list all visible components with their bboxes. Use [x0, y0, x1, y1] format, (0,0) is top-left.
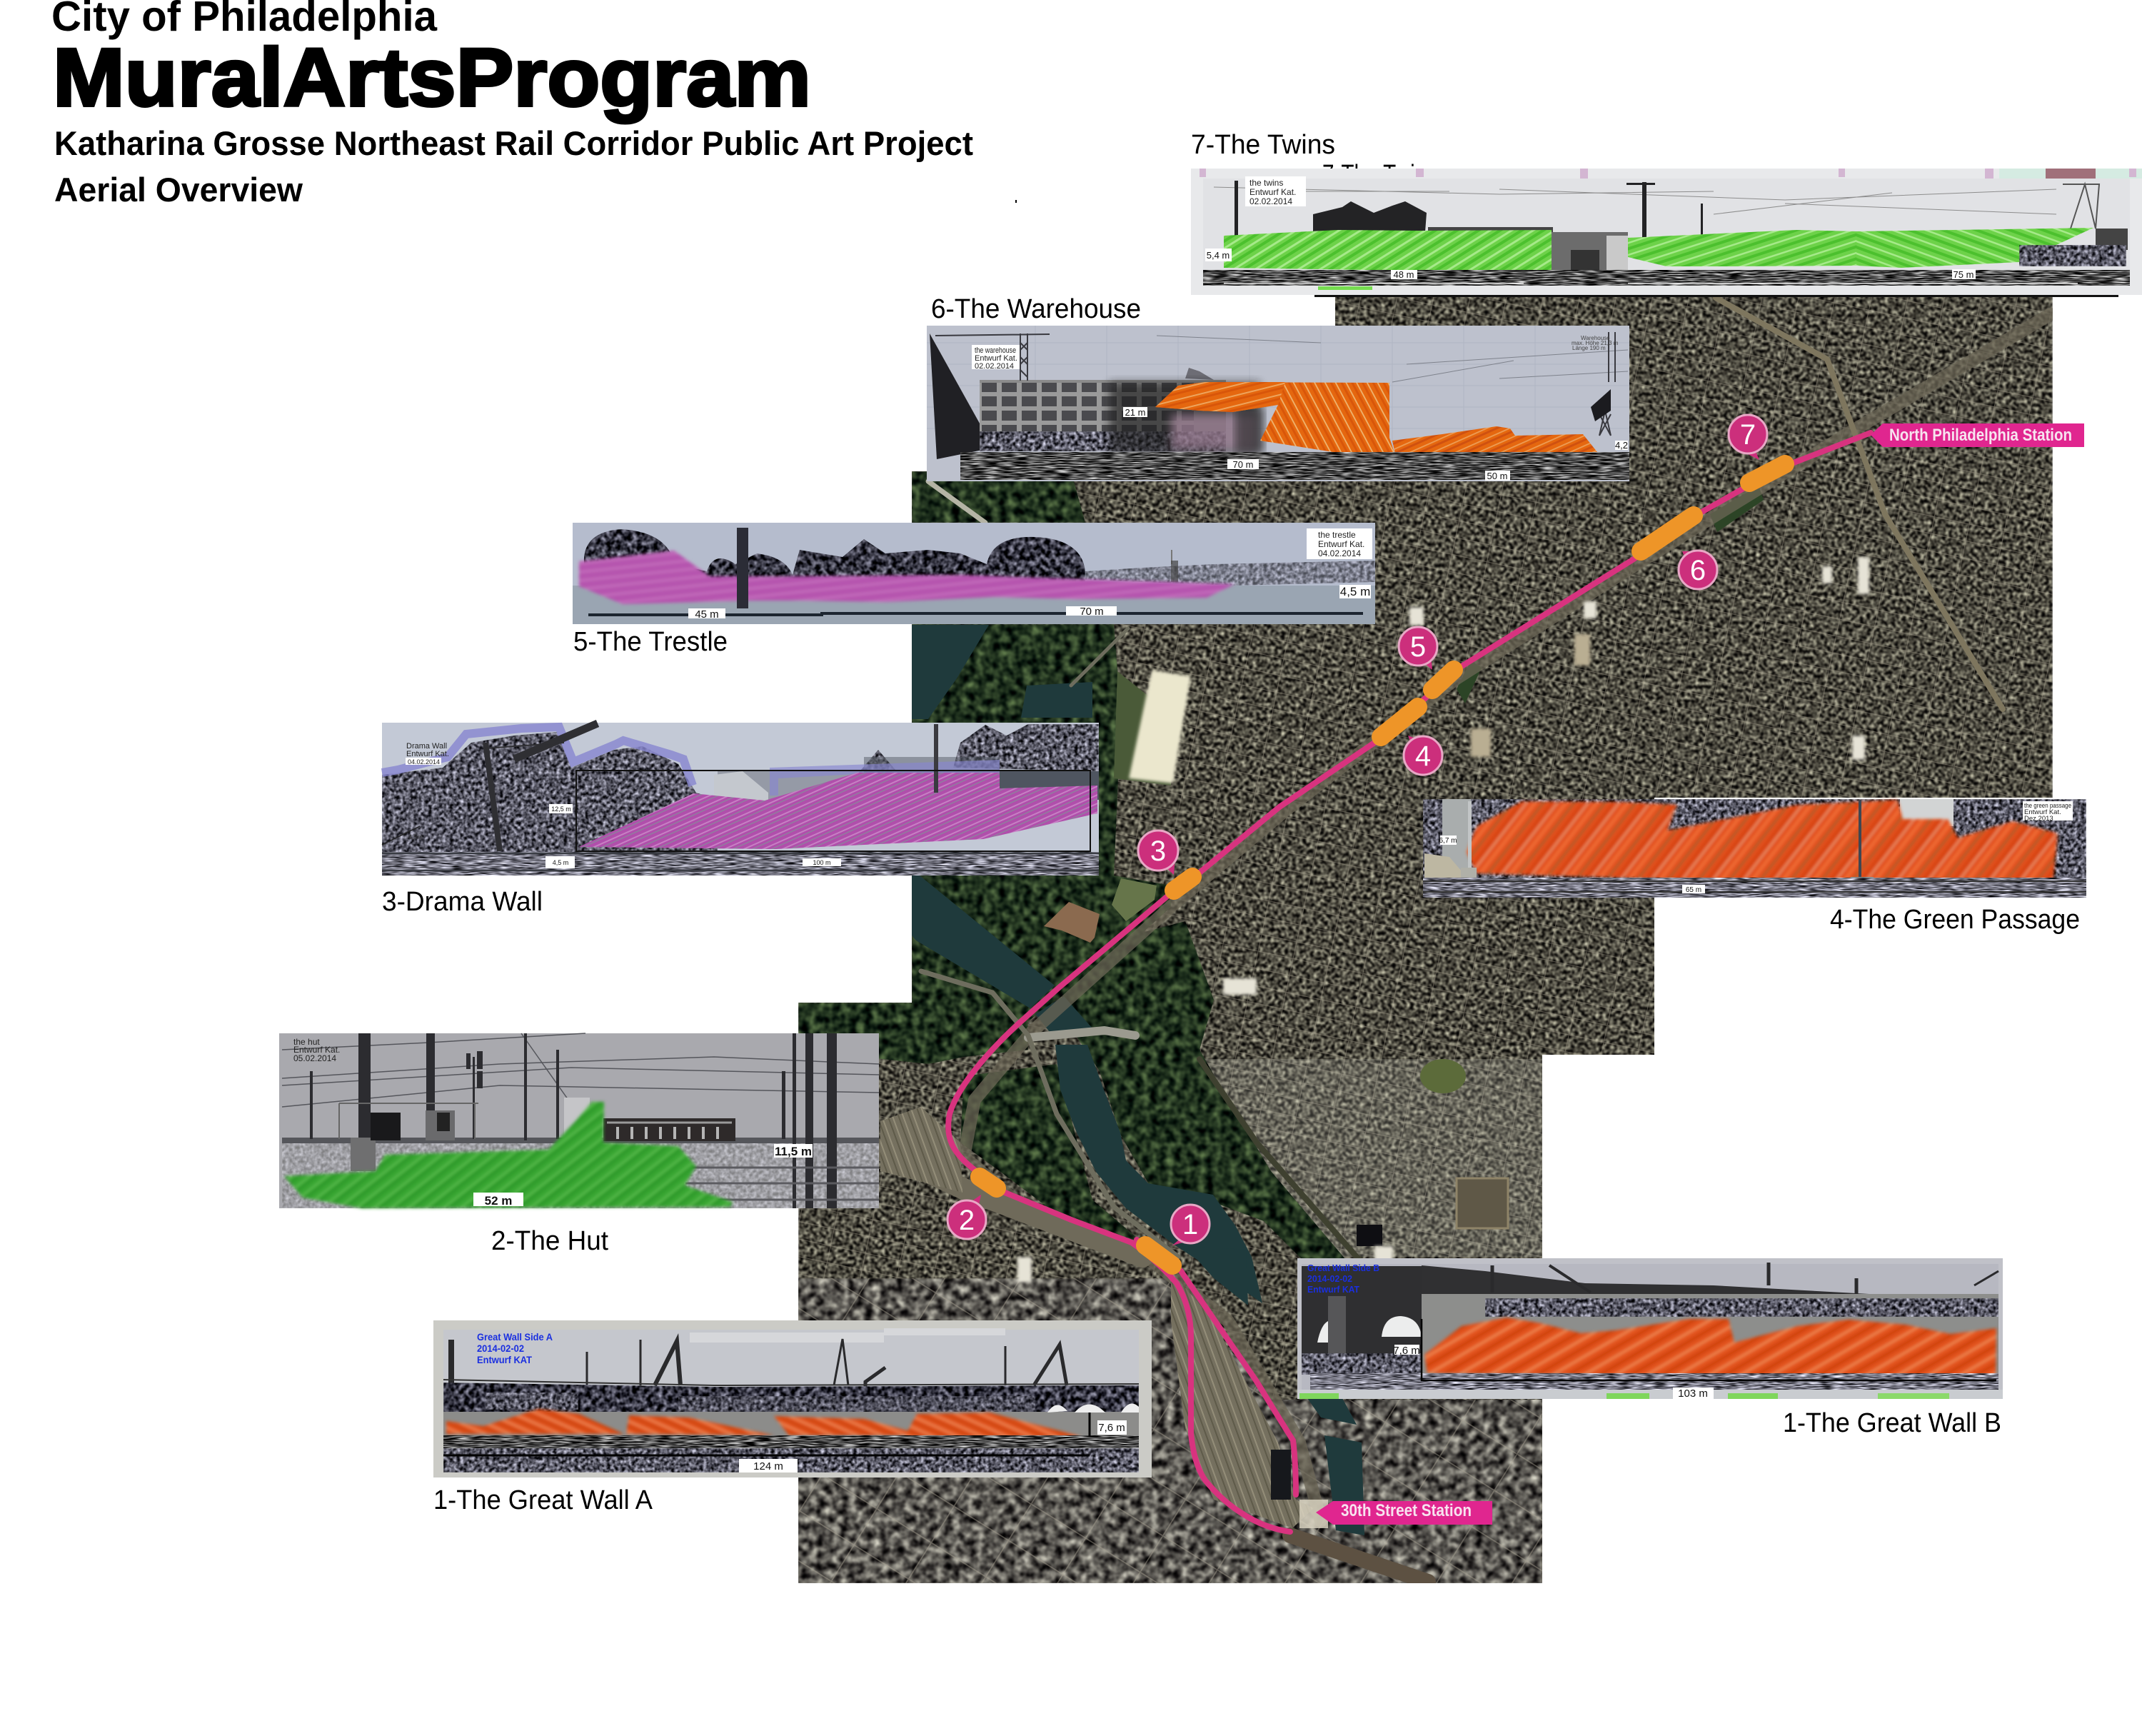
dimensions: 124 m: [753, 1460, 783, 1472]
note: Drama Wall: [406, 742, 447, 751]
paper sheet seams: [690, 1328, 1005, 1343]
dimensions: 45 m: [695, 608, 719, 621]
scale note: [1572, 335, 1619, 351]
towers: [935, 332, 1615, 436]
magenta paint: [579, 551, 1235, 604]
blue note: Great Wall Side A: [477, 1331, 553, 1343]
poles and gantries: [451, 1339, 1067, 1407]
baseline: [588, 613, 1363, 615]
overhead pole: [486, 723, 936, 851]
marker 7: [1729, 415, 1767, 460]
dimensions: 48 m: [1394, 269, 1414, 280]
dimensions: 4,5 m: [553, 859, 568, 866]
warehouse building: [930, 333, 1264, 459]
program wordmark: MuralArtsProgram: [53, 32, 811, 124]
caption: 5 The Trestle: 5-The Trestle: [573, 627, 728, 657]
dimensions: 100 m: [813, 859, 831, 866]
dimensions: [688, 585, 1371, 621]
station label: 30th Street: 30th Street Station: [1341, 1501, 1472, 1520]
note: the hut: [293, 1037, 320, 1047]
marker 1: 1: [1182, 1209, 1198, 1240]
blue note: [1307, 1263, 1379, 1295]
orange paint upper: [1155, 382, 1397, 459]
note: Dez.2013: [2024, 815, 2053, 823]
purple outline bands: [382, 727, 693, 786]
drafting grid: [927, 326, 1629, 481]
marker 3: [1138, 831, 1178, 875]
note: 04.02.2014: [408, 758, 440, 766]
trees: [382, 724, 1099, 853]
dimensions: [1439, 836, 1705, 894]
caption: 4 The Green Passage: 4-The Green Passage: [1830, 905, 2080, 935]
marker 6: 6: [1690, 555, 1706, 586]
dimensions: 4,5 m: [1340, 585, 1370, 598]
title block: [51, 0, 973, 209]
frame rectangle: [576, 771, 1090, 851]
note box: the twins: [1250, 178, 1283, 188]
note: [406, 742, 449, 766]
blue note: Entwurf KAT: [1307, 1284, 1359, 1295]
viaduct deck: [1422, 1265, 1998, 1303]
marker 3: 3: [1150, 836, 1166, 867]
caption: 3 Drama Wall: 3-Drama Wall: [382, 887, 543, 917]
scale note: Länge 190 m: [1572, 345, 1606, 351]
Schuylkill river and ponds: [912, 625, 1364, 1535]
note box: Entwurf Kat.: [1318, 539, 1364, 549]
marker 2: 2: [959, 1205, 975, 1236]
dimensions: 12,5 m: [551, 806, 571, 813]
green paint: [284, 1102, 733, 1208]
tracks: [1203, 270, 2130, 286]
tracks: [960, 452, 1629, 480]
railing: [443, 1380, 1139, 1385]
marker 5: 5: [1410, 631, 1426, 663]
urban fabric texture: [798, 295, 2053, 1583]
railings: [685, 1168, 879, 1200]
green paint left: [1224, 230, 1552, 274]
dimensions: [473, 1144, 813, 1208]
notes: Entwurf Kat.: [975, 354, 1017, 363]
dimensions: 7,6 m: [1098, 1422, 1125, 1434]
dimensions: 103 m: [1678, 1388, 1708, 1400]
blue note: 2014-02-02: [477, 1343, 524, 1354]
overhead wires: [282, 1033, 879, 1114]
note: [2023, 801, 2073, 823]
panel: 6 The Warehouse: [927, 326, 1629, 481]
green paint far right: [1856, 228, 2093, 268]
marker 7: 7: [1740, 419, 1756, 451]
bright rooftops: [1017, 557, 1869, 1283]
panel: 1 The Great Wall A: [433, 1320, 1152, 1477]
dimensions: [1393, 1345, 1714, 1400]
marker 5: [1399, 627, 1437, 670]
dimensions: [382, 804, 841, 868]
marker 4: 4: [1415, 741, 1431, 772]
route line between stations: [948, 433, 1871, 1532]
marker 6: [1679, 551, 1717, 589]
note: Entwurf Kat.: [293, 1045, 340, 1055]
blue note: Great Wall Side B: [1307, 1263, 1379, 1273]
orange mural site segments: [980, 464, 1785, 1265]
panel: 2 The Hut: [279, 1033, 879, 1208]
marker 4: [1404, 736, 1442, 775]
rail corridors and roads: [880, 298, 2051, 1582]
caption: 7 The Twins: 7-The Twins: [1191, 130, 1335, 160]
dimensions: 50 m: [1487, 471, 1507, 481]
note: 05.02.2014: [293, 1053, 336, 1063]
scale note: Warehouse: [1581, 335, 1610, 341]
bottom paper strip: [1297, 1390, 2003, 1399]
brick building: [603, 1118, 735, 1141]
clipped duplicate caption behind panel 7: 7-The Twins: [1322, 160, 1437, 190]
panel: 7 The Twins: [1191, 169, 2142, 297]
dimensions: 70 m: [1080, 606, 1104, 618]
orange paint: [1424, 1318, 1996, 1378]
magenta paint: [579, 773, 1097, 849]
dimensions: [1205, 249, 1976, 280]
panel: 3 Drama Wall: [382, 723, 1099, 875]
rail yard: [880, 1107, 1328, 1528]
caption: 2 The Hut: 2-The Hut: [491, 1226, 608, 1256]
dimensions: [1123, 407, 1628, 481]
note box: [1307, 528, 1372, 559]
tracks: [1423, 878, 2086, 898]
panel: 1 The Great Wall B: [1297, 1258, 2003, 1400]
note: Entwurf Kat.: [2024, 808, 2061, 816]
caption: 1 The Great Wall B: 1-The Great Wall B: [1783, 1408, 2001, 1438]
orange paint: [1467, 800, 2058, 883]
dimensions: 6,7 m: [1439, 837, 1457, 845]
note box: 02.02.2014: [1250, 196, 1292, 206]
poles: [310, 1033, 837, 1208]
fenced boxes: [339, 1103, 478, 1140]
snowy ground: [282, 1138, 879, 1208]
notes: 02.02.2014: [975, 362, 1014, 371]
dimensions: 70 m: [1233, 459, 1253, 470]
station label: North Philadelphia: [1871, 423, 2084, 447]
marker 1: [1171, 1205, 1210, 1245]
dimensions: 75 m: [1954, 269, 1973, 280]
tree line: [584, 529, 1375, 586]
wall with graffiti: [1422, 1294, 1998, 1374]
note box: [1245, 176, 1306, 206]
panel: 5 The Trestle: [573, 523, 1375, 624]
poles: [1461, 800, 1874, 888]
blue note: Entwurf KAT: [477, 1354, 532, 1365]
note box: 04.02.2014: [1318, 548, 1361, 558]
aerial map of the rail corridor: [798, 295, 2053, 1583]
notes: the warehouse: [975, 346, 1016, 355]
parks and fields: [1044, 670, 1508, 1246]
orange paint: [446, 1409, 1082, 1437]
caption: 6 The Warehouse: 6-The Warehouse: [931, 294, 1141, 324]
viaduct wall with graffiti: [443, 1383, 1139, 1436]
caption: 1 The Great Wall A: 1-The Great Wall A: [433, 1485, 653, 1515]
note: the green passage: [2024, 802, 2071, 810]
project title: Katharina Grosse Northeast Rail Corridor Public Art Project: [54, 124, 973, 162]
dimensions: [739, 1420, 1127, 1472]
viaduct left: [1302, 1266, 1422, 1375]
measure lines: [443, 1413, 1090, 1455]
dark buildings: [1235, 181, 1703, 238]
notes: [972, 345, 1020, 371]
dimensions: 4,2: [1615, 440, 1628, 451]
station label: North Philadelphia: North Philadelphia Station: [1889, 426, 2072, 445]
dimensions: 21 m: [1125, 407, 1145, 418]
wooded park areas: [798, 471, 1764, 1278]
dimensions: 7,6 m: [1393, 1345, 1420, 1357]
panel: 4 The Green Passage: [1423, 799, 2086, 898]
note box: Entwurf Kat.: [1250, 187, 1296, 197]
dimensions: 4,5m: [408, 833, 423, 841]
gap with station structure: [1552, 232, 1628, 271]
note: [293, 1037, 340, 1063]
blue note: [477, 1331, 553, 1365]
dimensions: 65 m: [1686, 886, 1701, 894]
hut tower: [564, 1098, 590, 1137]
tracks: [382, 852, 1099, 875]
blue note: 2014-02-02: [1307, 1273, 1352, 1284]
dimensions: 52 m: [485, 1194, 512, 1208]
note: Entwurf Kat.: [406, 750, 449, 758]
scale note: max. Höhe 21,3 m: [1572, 340, 1619, 346]
dimensions: 5,4 m: [1207, 250, 1230, 261]
tracks and ground: [443, 1435, 1139, 1472]
tracks: [1310, 1373, 1998, 1390]
dimensions: 11,5 m: [775, 1145, 812, 1158]
arches: [1047, 1404, 1139, 1413]
subtitle: Aerial Overview: [54, 171, 303, 209]
marker 2: [947, 1195, 986, 1239]
green paint right: [1628, 230, 1856, 266]
orange paint lower: [1392, 426, 1597, 461]
note box: the trestle: [1318, 530, 1356, 540]
